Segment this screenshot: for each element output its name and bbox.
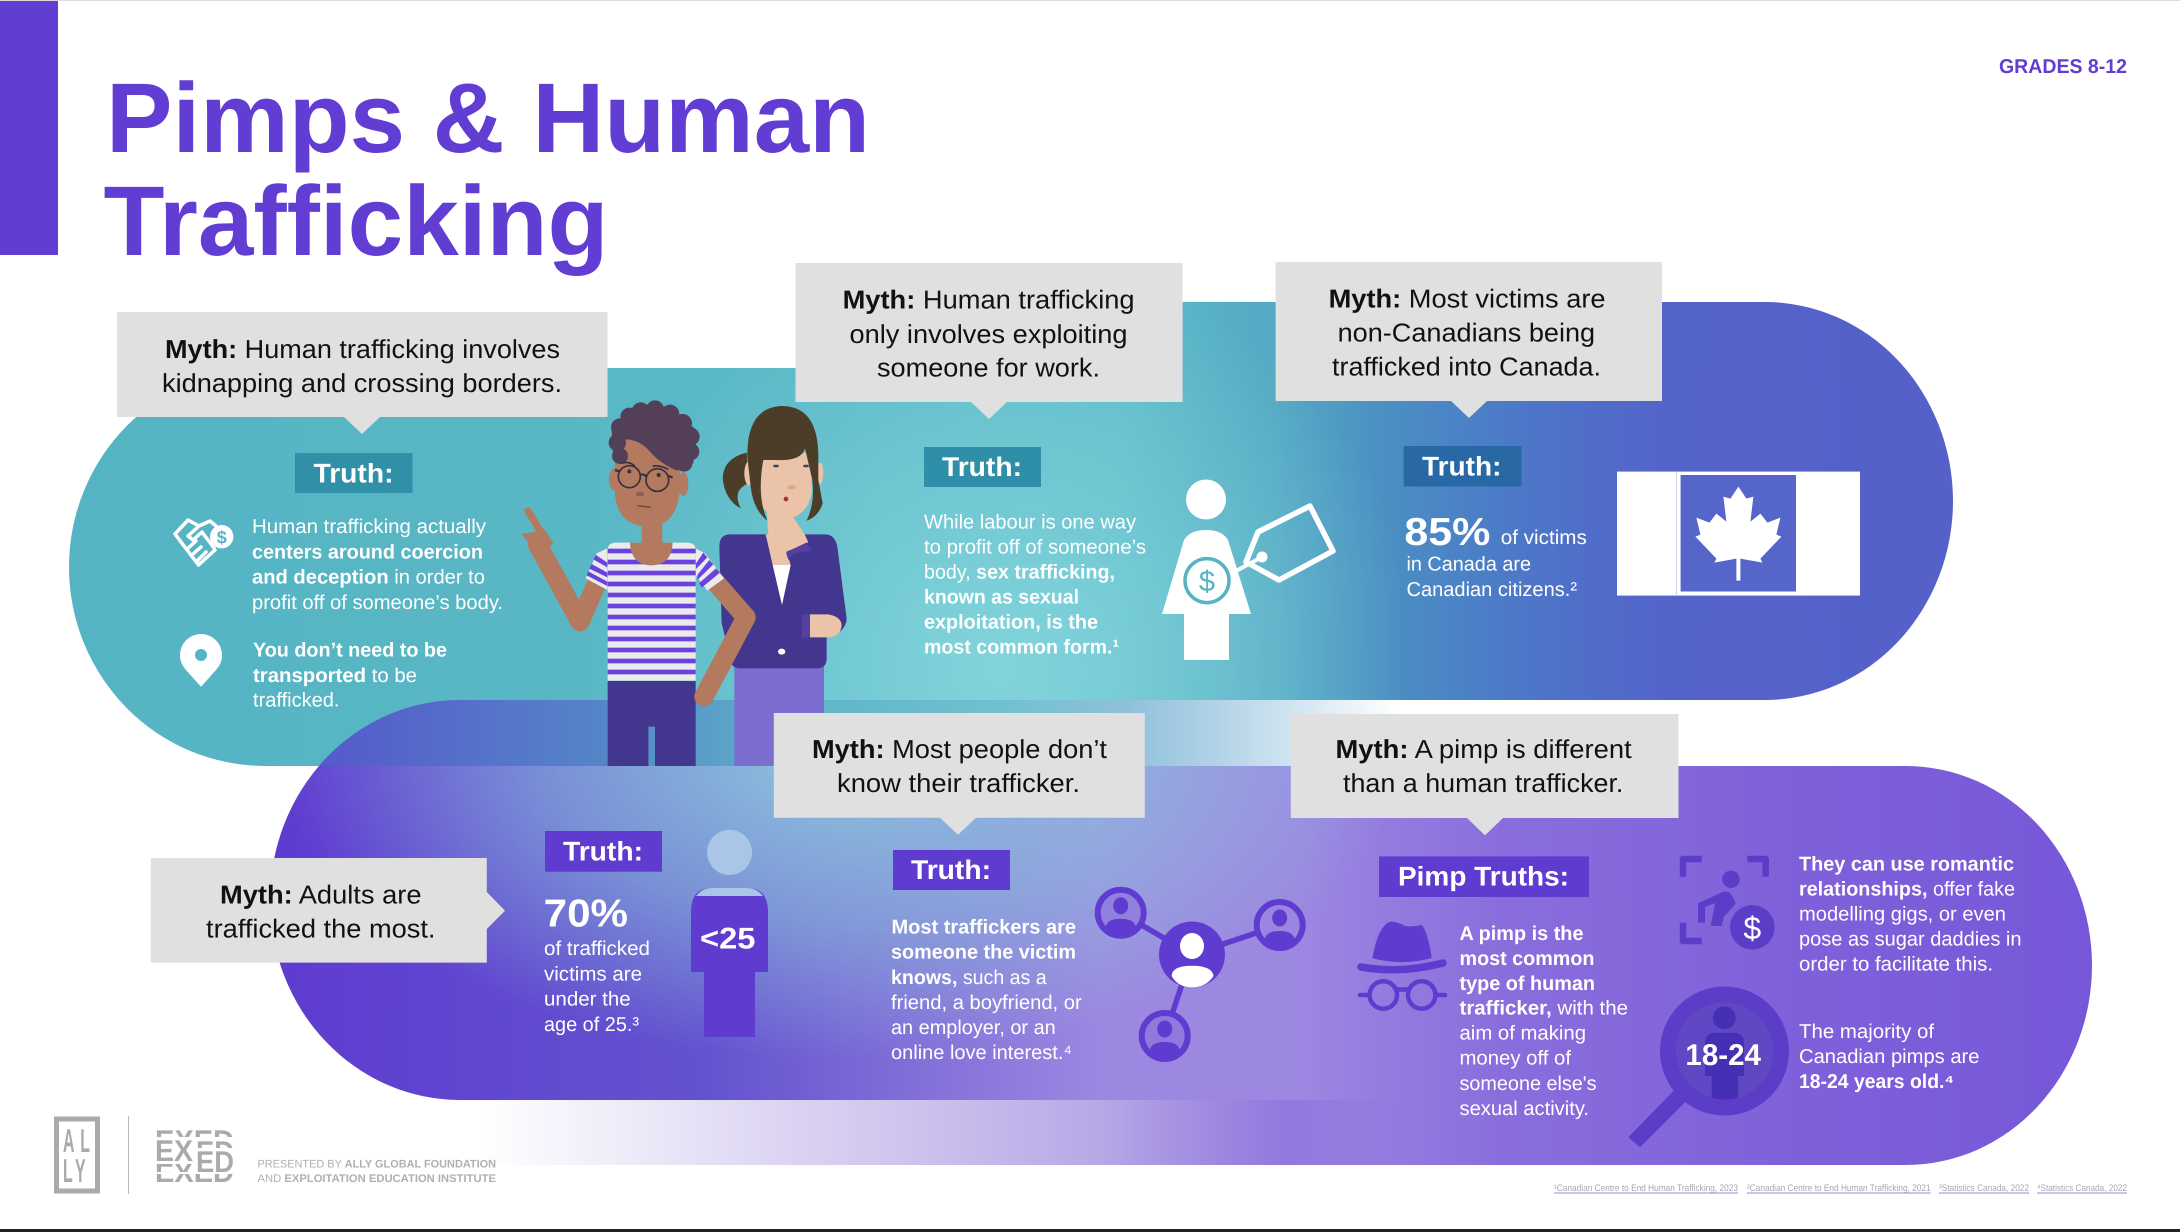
icon: Canadian flag (1617, 472, 1860, 596)
text: majority aged 18-24: Canadian pimps are (1799, 1046, 1980, 1068)
presenter credit: PRESENTED BY ALLY GLOBAL FOUNDATION (258, 1158, 496, 1170)
text: majority aged 18-24 (1799, 1021, 1980, 1093)
icon: handshake heart with dollar: $ (217, 528, 227, 548)
myth callout: adults: Myth: Adults are (220, 880, 422, 910)
accent bar (0, 1, 58, 255)
text: majority aged 18-24: The majority of (1799, 1021, 1934, 1043)
title: Pimps & Human (106, 62, 870, 173)
stat: 70% under 25: under the (544, 988, 631, 1010)
presenter credit: AND EXPLOITATION EDUCATION INSTITUTE (258, 1173, 496, 1185)
logo: EXED: ED (196, 1146, 234, 1179)
text: transport not needed: transported to be (253, 665, 417, 687)
myth callout: kidnapping: Myth: Human trafficking involves (165, 334, 560, 364)
pimp truths tag (1379, 856, 1589, 897)
myth callout: adults: trafficked the most. (206, 914, 436, 944)
grade label: GRADES 8-12 (1999, 56, 2127, 78)
text: sex trafficking most common (924, 512, 1146, 658)
myth callout: kidnapping (117, 312, 608, 434)
section: pimp vs trafficker myth (1291, 714, 2022, 1147)
text: transport not needed (253, 640, 447, 712)
truth tag: Truth: (942, 452, 1022, 482)
logo: ALLY (56, 1119, 98, 1191)
footnote references: ²Canadian Centre to End Human Trafficking, 2021 (1747, 1183, 1931, 1194)
logo: EXED: EXED (155, 1156, 234, 1189)
footnote references: ¹Canadian Centre to End Human Trafficking, 2023 (1554, 1183, 1738, 1194)
text: most common trafficker: trafficker, with the (1460, 998, 1628, 1020)
text: centers around coercion: Human trafficking actually (252, 516, 486, 538)
truth tag (1404, 446, 1522, 486)
stat: 85% Canadian citizens: in Canada are (1406, 554, 1531, 576)
icon: location pin (180, 634, 222, 687)
text: most common trafficker (1460, 923, 1628, 1120)
truth tag (893, 850, 1010, 890)
myth callout: work: Myth: Human trafficking (843, 284, 1135, 314)
man figure (521, 400, 746, 766)
text: transport not needed: trafficked. (253, 690, 340, 712)
section: non-Canadians myth (1276, 262, 1860, 601)
myth callout: Canadians: Myth: Most victims are (1329, 284, 1606, 314)
logo: ALLY: LY (63, 1152, 89, 1189)
text: traffickers known to victim: an employer, or an (891, 1017, 1056, 1039)
text: romantic relationships: pose as sugar daddies in (1799, 929, 2022, 951)
text: romantic relationships: modelling gigs, or even (1799, 904, 2006, 926)
myth callout: pimp: than a human trafficker. (1343, 768, 1623, 798)
text: sex trafficking most common: While labour is one way (924, 512, 1136, 534)
stat: 70% under 25: of trafficked (544, 938, 650, 960)
icon: woman with price tag (1162, 480, 1333, 660)
section: adults myth (151, 830, 768, 1037)
myth callout: pimp (1291, 714, 1678, 835)
text: traffickers known to victim: friend, a boyfriend, or (891, 992, 1082, 1014)
stat: 70% under 25: age of 25.³ (544, 1014, 639, 1036)
section: kidnapping myth (117, 312, 608, 712)
text: romantic relationships: order to facilitate this. (1799, 954, 1993, 976)
truth tag: Truth: (314, 458, 394, 488)
truth tag (924, 447, 1041, 487)
text: sex trafficking most common: to profit off of someone’s (924, 536, 1146, 558)
icon: handshake heart with dollar (175, 520, 233, 565)
text: traffickers known to victim: online love interest.⁴ (891, 1042, 1072, 1064)
text: sex trafficking most common: most common form.¹ (924, 636, 1119, 658)
text: traffickers known to victim: Most traffickers are (892, 916, 1076, 938)
myth callout: kidnapping: kidnapping and crossing borders. (162, 368, 562, 398)
logo: EXED: ED (196, 1136, 234, 1169)
panel: top teal-to-blue band (60, 295, 1960, 775)
text: centers around coercion: centers around coercion (252, 542, 483, 564)
text: most common trafficker: aim of making (1460, 1022, 1586, 1044)
text: most common trafficker: most common (1460, 948, 1594, 970)
myth callout: work (796, 263, 1183, 419)
icon: hat and glasses (1360, 922, 1445, 1009)
text: romantic relationships (1799, 854, 2022, 976)
text: centers around coercion (252, 516, 503, 614)
footnote references (1554, 1183, 2127, 1194)
text: most common trafficker: type of human (1460, 973, 1595, 995)
myth callout: work: only involves exploiting (850, 319, 1128, 349)
truth tag (545, 831, 662, 872)
text: most common trafficker: A pimp is the (1460, 923, 1584, 945)
title (104, 62, 870, 276)
illustration: two standing people (521, 400, 847, 766)
myth callout: Canadians: trafficked into Canada. (1332, 352, 1601, 382)
myth callout: work: someone for work. (877, 352, 1100, 382)
myth callout: Canadians: non-Canadians being (1338, 318, 1595, 348)
stat: 85% Canadian citizens (1404, 511, 1587, 601)
text: traffickers known to victim (891, 916, 1082, 1064)
icon: magnifier with age 18-24 (1628, 986, 1789, 1147)
text: traffickers known to victim: someone the victim (891, 942, 1076, 964)
text: sex trafficking most common: body, sex trafficking, (924, 562, 1115, 584)
icon: connected people network (1098, 890, 1303, 1059)
icon: person under 25 (691, 830, 768, 1037)
text: most common trafficker: someone else's (1460, 1073, 1596, 1095)
icon: person in scan frame with dollar (1683, 859, 1775, 950)
truth tag: Truth: (563, 836, 643, 866)
presenter credit (258, 1158, 496, 1185)
text: romantic relationships: They can use romantic (1799, 854, 2014, 876)
footnote references: ³Statistics Canada, 2022 (1939, 1183, 2029, 1194)
text: sex trafficking most common: exploitation, is the (924, 612, 1098, 634)
myth callout: pimp: Myth: A pimp is different (1336, 734, 1633, 764)
title: Trafficking (104, 165, 608, 276)
stat: 70% under 25: victims are (544, 964, 642, 986)
truth tag: Truth: (1422, 452, 1502, 482)
truth tag: Truth: (911, 855, 991, 885)
myth callout: Canadians (1276, 262, 1662, 418)
text: traffickers known to victim: knows, such as a (891, 967, 1048, 989)
pimp truths tag: Pimp Truths: (1398, 862, 1569, 892)
text: transport not needed: You don’t need to be (253, 640, 447, 662)
logo: ALLY: AL (63, 1122, 96, 1159)
text: most common trafficker: sexual activity. (1460, 1098, 1589, 1120)
logo: EXED (156, 1130, 233, 1182)
text: most common trafficker: money off of (1460, 1048, 1571, 1070)
icon: person in scan frame with dollar: $ (1743, 910, 1761, 946)
myth callout: know trafficker: know their trafficker. (837, 768, 1080, 798)
stat: 85% Canadian citizens: Canadian citizens.² (1406, 579, 1577, 601)
myth callout: know trafficker: Myth: Most people don’t (812, 734, 1108, 764)
section: know their trafficker myth (774, 713, 1303, 1064)
logo: EXED: EX (155, 1135, 193, 1168)
section: exploitation for work myth (796, 263, 1333, 660)
stat: 70% under 25: 70% (544, 893, 628, 936)
icon: woman with price tag: $ (1199, 566, 1215, 598)
truth tag (295, 453, 412, 493)
logo: EXED: EXED (155, 1125, 234, 1158)
text: sex trafficking most common: known as sexual (924, 586, 1079, 608)
text: romantic relationships: relationships, offer fake (1799, 879, 2015, 901)
myth callout: adults (151, 858, 505, 963)
icon: magnifier with age 18-24: 18-24 (1685, 1039, 1761, 1072)
woman figure (719, 406, 847, 766)
text: centers around coercion: profit off of someone’s body. (252, 592, 503, 614)
stat: 85% Canadian citizens: 85% (1404, 511, 1490, 554)
footnote references: ⁴Statistics Canada, 2022 (2037, 1183, 2127, 1194)
icon: person under 25: <25 (700, 923, 756, 956)
stat: 70% under 25 (544, 893, 650, 1036)
text: majority aged 18-24: 18-24 years old.⁴ (1799, 1071, 1954, 1093)
text: centers around coercion: and deception in order to (252, 566, 485, 588)
panel: bottom purple band (260, 695, 2100, 1170)
logo: EXED: EX (155, 1158, 193, 1191)
myth callout: know trafficker (774, 713, 1145, 835)
stat: 85% Canadian citizens: of victims (1501, 527, 1587, 549)
